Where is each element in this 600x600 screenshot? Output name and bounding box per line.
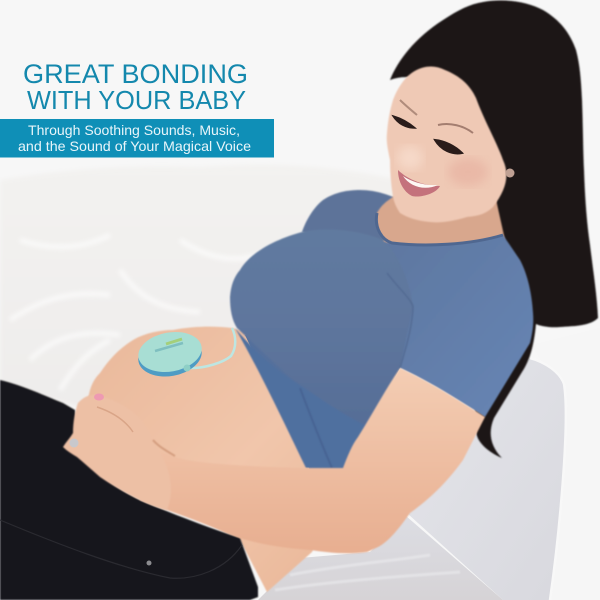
device: cord <box>187 328 235 368</box>
banner <box>0 119 274 158</box>
hair <box>390 0 598 458</box>
shirt underlay <box>245 300 405 472</box>
black jeans <box>0 380 258 600</box>
sleeve seam <box>387 273 413 368</box>
eyelash right <box>435 140 462 153</box>
rivet <box>146 560 152 566</box>
painted nail <box>94 394 104 400</box>
teeth <box>403 176 438 188</box>
white fur throw <box>0 165 400 420</box>
eyebrow left <box>400 100 417 115</box>
hand on belly <box>63 394 175 510</box>
pocket seam <box>0 520 242 578</box>
bust <box>230 230 413 427</box>
title <box>23 59 248 115</box>
eyelash left <box>393 116 415 128</box>
ear and earring <box>506 168 514 178</box>
ring <box>70 438 78 448</box>
smile <box>398 170 440 197</box>
belly <box>88 327 345 592</box>
title: GREAT BONDING <box>23 59 248 89</box>
nose highlight <box>397 146 423 170</box>
face <box>387 66 514 222</box>
sofa cushion and arm <box>258 328 600 600</box>
shirt neckline <box>376 213 503 245</box>
cheek blush <box>448 158 488 186</box>
blue t-shirt <box>230 190 533 472</box>
banner: Through Soothing Sounds, Music, <box>28 122 240 138</box>
banner: and the Sound of Your Magical Voice <box>18 138 251 154</box>
arm <box>140 368 485 553</box>
title: WITH YOUR BABY <box>27 85 246 115</box>
collar and shoulder <box>302 190 393 245</box>
sleeve and right side <box>372 235 533 417</box>
seat cushion <box>258 516 503 600</box>
eyebrow right <box>438 124 473 133</box>
device: disc <box>135 327 205 377</box>
lower fold band <box>235 328 365 470</box>
device: shadow base <box>135 331 205 381</box>
neck and chest <box>368 190 505 247</box>
